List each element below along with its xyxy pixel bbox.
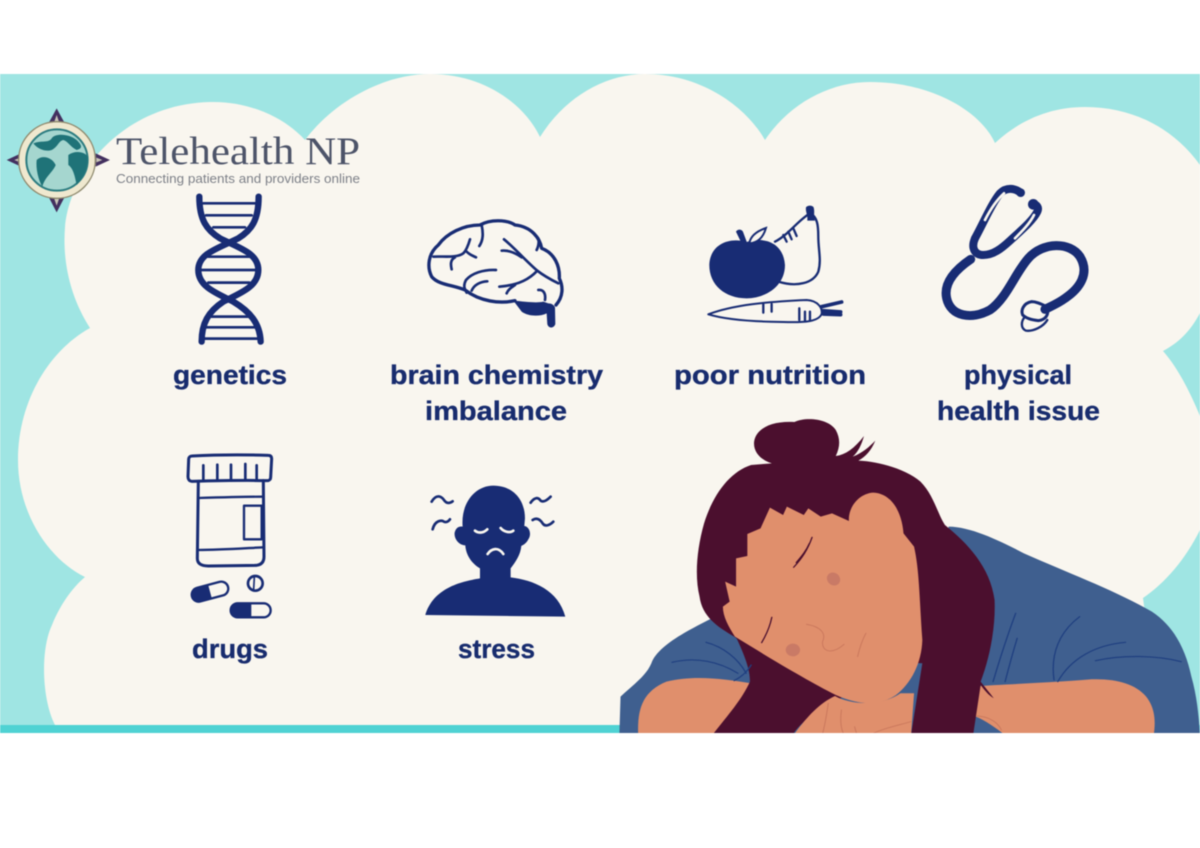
item: poor nutrition [674,206,866,390]
cloud shape [18,74,1200,725]
background panel [0,74,1200,733]
icon: stressed person [425,486,565,617]
label: stress [458,634,535,664]
label [390,360,603,426]
illustration: tired woman resting head on arms [619,419,1200,740]
label: health issue [937,396,1100,426]
icon: brain [429,221,562,327]
hair [697,419,995,735]
face [723,493,922,703]
eyebrow and eye lines [762,537,812,643]
cheek marks [826,572,840,586]
label: physical [964,360,1072,390]
item: brain chemistry imbalance [390,221,603,426]
label: poor nutrition [674,360,866,390]
icon: compass globe [7,108,110,212]
icon: pill bottle [188,455,272,617]
logo: Telehealth NP [7,108,360,212]
item: genetics [173,197,287,390]
icon: DNA helix [198,197,261,342]
arm right [971,679,1155,735]
nose and mouth lines [806,624,1001,733]
label: imbalance [425,396,567,426]
arm left [638,678,755,735]
hair strand under the face [714,638,842,734]
label: drugs [192,634,268,664]
shirt folds [672,613,1181,682]
shirt [619,527,1200,740]
bottom teal strip [0,725,1200,733]
item: physical health issue [937,188,1100,426]
label [937,360,1100,426]
icon: apple, pear and carrot [708,206,842,322]
item: stress [425,486,565,664]
hands [794,693,914,735]
logo tagline: Connecting patients and providers online [116,171,360,186]
icon: stethoscope [946,188,1084,331]
item: drugs [188,455,272,664]
label: brain chemistry [390,360,603,390]
label: genetics [173,360,287,390]
logo wordmark: Telehealth NP [116,130,360,173]
